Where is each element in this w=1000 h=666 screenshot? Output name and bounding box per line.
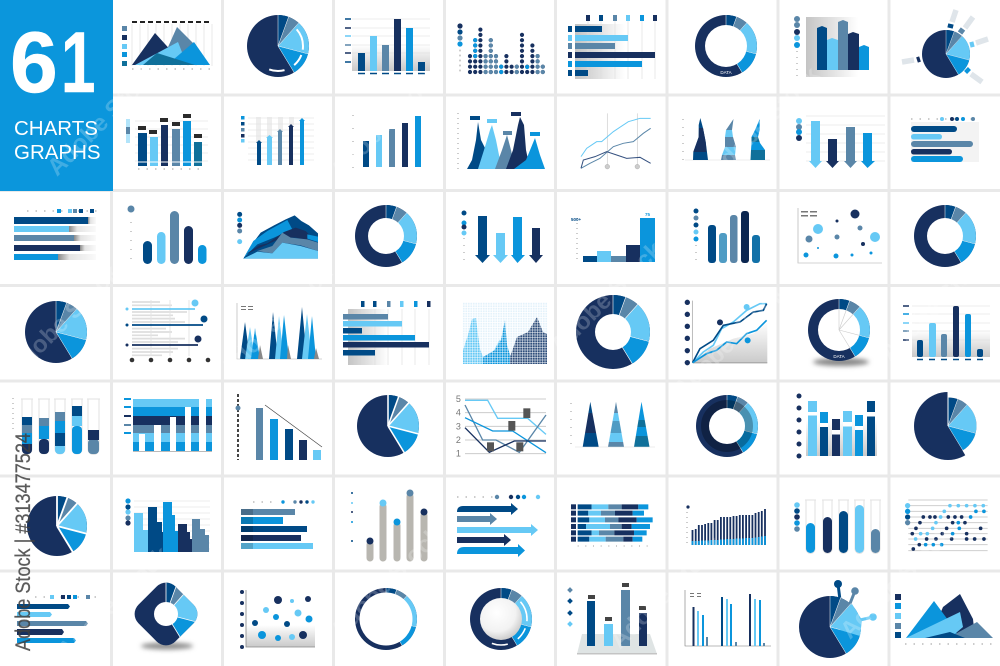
chart: double ring donut — [696, 394, 758, 457]
chart: grouped thin bars — [685, 590, 771, 646]
chart: pie with oversized slice — [914, 392, 982, 460]
title number — [10, 14, 95, 111]
chart: striped cones — [571, 400, 655, 447]
chart: simple columns — [353, 115, 421, 168]
faint diagonal stock overlay: Adobe Stock — [42, 58, 165, 181]
chart: down arrows with legend — [462, 210, 543, 264]
chart: labelled columns — [126, 114, 208, 169]
chart: five level line chart: 4 — [456, 408, 461, 418]
chart: 3D ring with sphere — [470, 587, 532, 650]
chart: stacked columns with value bands — [796, 394, 877, 458]
chart: ring with labels — [695, 14, 757, 77]
chart: layered mountain area — [237, 212, 318, 259]
chart: pie — [25, 300, 87, 363]
chart: mountain with square legend — [895, 594, 994, 644]
chart: pixel grid area chart — [463, 302, 547, 364]
chart: stacked test tubes — [13, 398, 100, 455]
chart: five level line chart: 1 — [456, 449, 461, 459]
chart: pie with stalks — [799, 580, 877, 658]
faint diagonal stock overlay: Adobe Stock — [325, 61, 448, 184]
chart: column chart — [345, 19, 430, 74]
chart: many thin columns — [686, 505, 765, 545]
chart: horizontal bars — [568, 15, 657, 79]
faint diagonal stock overlay: Adobe Stock — [875, 243, 998, 366]
chart: down arrows — [796, 116, 885, 168]
chart: rounded-top columns — [903, 306, 990, 360]
faint diagonal stock overlay: Adobe Stock — [325, 521, 448, 644]
faint diagonal stock overlay: Adobe Stock — [215, 259, 338, 382]
chart: ring with labels: DATA — [720, 70, 732, 75]
chart: pie with separated slice — [357, 394, 419, 457]
chart: five level line chart: 5 — [456, 394, 461, 404]
chart: ring with shadow and spokes: DATA — [833, 354, 845, 359]
chart: arrow-tip horizontal bars — [17, 595, 96, 643]
title number: 1 — [61, 14, 95, 110]
chart: test tubes single fill — [794, 500, 881, 554]
chart: mountain with legend — [122, 22, 212, 69]
title number: 6 — [10, 15, 58, 111]
chart: pie with rays — [902, 10, 988, 82]
title words: GRAPHS — [14, 141, 101, 164]
chart: line chart — [581, 113, 651, 169]
chart: histogram with callouts: 500+ — [571, 217, 582, 222]
chart: histogram with callouts — [571, 212, 655, 262]
chart: labelled horizontal bars — [241, 500, 315, 549]
chart: scatter with gradient floor — [240, 590, 315, 649]
chart: five level line chart: 2 — [456, 435, 461, 445]
faint diagonal stock overlay: Adobe Stock — [605, 531, 728, 654]
chart: rounded horizontal bars on grid — [911, 117, 979, 162]
chart: exploded pie — [27, 495, 87, 556]
chart: spike triangles — [237, 303, 322, 359]
chart: stepped overlapping columns — [125, 498, 210, 552]
chart: curled arrow bands — [457, 495, 540, 557]
chart: stacked horizontal bars — [571, 504, 654, 546]
chart: pie with inner arcs — [247, 14, 309, 77]
chart: stepped columns with gradient back — [794, 16, 869, 77]
chart: donut — [914, 204, 976, 267]
faint diagonal stock overlay: Adobe Stock — [545, 236, 668, 359]
chart: histogram with callouts: 75 — [645, 212, 651, 217]
chart: declining bars with trend line — [236, 394, 322, 460]
chart: lollipop highlight lines — [126, 300, 210, 362]
faint diagonal stock overlay: Adobe Stock — [702, 61, 825, 184]
chart: donut — [355, 204, 417, 267]
chart: multi-line growth chart — [685, 300, 767, 365]
chart: gray lollipop columns — [351, 490, 428, 562]
chart: ring with shadow and spokes — [808, 298, 870, 366]
chart: five level line chart — [456, 394, 546, 459]
chart: horizontal bars with gradient — [343, 301, 430, 365]
title words — [14, 117, 101, 164]
chart: dot timeline grid — [905, 500, 988, 551]
panel: title block — [0, 0, 113, 191]
stock watermark: Adobe Stock | #313477524 — [12, 433, 35, 651]
chart: spindle shapes — [683, 118, 770, 160]
faint diagonal stock overlay: Adobe Stock — [668, 280, 791, 403]
faint diagonal stock overlay: Adobe Stock — [835, 521, 958, 644]
chart: peaks with tags — [458, 112, 545, 170]
chart: bubble scatter — [798, 208, 882, 263]
chart: stacked bands with white steps — [124, 398, 212, 452]
chart: pill columns — [128, 206, 206, 264]
title words: CHARTS — [14, 117, 98, 140]
faint diagonal stock overlay: Adobe Stock — [2, 259, 125, 382]
chart: cylinders — [694, 208, 760, 264]
chart: rounded diamond donut — [134, 582, 198, 653]
faint diagonal stock overlay: Adobe Stock — [52, 541, 175, 664]
chart: dot columns — [457, 23, 543, 74]
chart: ribbon horizontal bars — [14, 209, 98, 260]
chart: large donut — [576, 294, 650, 369]
chart: arrow columns — [241, 116, 314, 165]
chart: five level line chart: 3 — [456, 421, 461, 431]
chart: thin ring — [355, 587, 417, 650]
chart: columns on floor — [567, 583, 657, 654]
